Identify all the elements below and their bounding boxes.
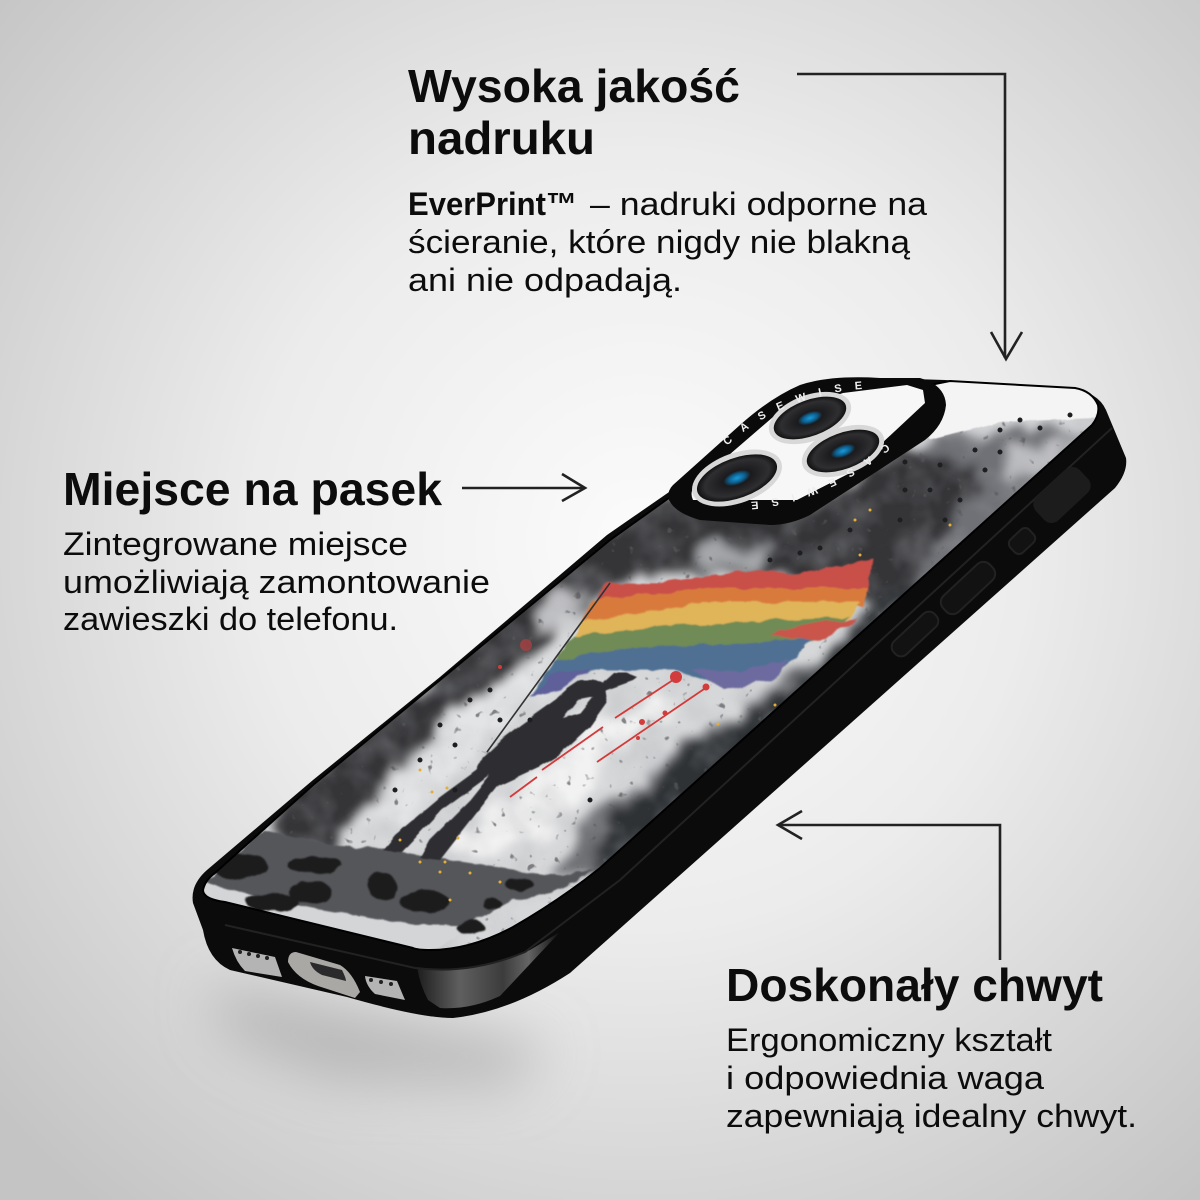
brand text upper: CASEWISE xyxy=(724,381,862,444)
rainbow flag xyxy=(530,558,873,697)
gold flecks xyxy=(400,510,950,900)
body text: EverPrint™ xyxy=(408,186,577,222)
heading: Miejsce na pasek xyxy=(63,463,442,515)
storm clouds xyxy=(280,432,1085,885)
heading: Wysoka jakość xyxy=(408,60,740,112)
speaker left xyxy=(232,948,282,977)
phone shadow xyxy=(210,985,550,1085)
arrow: grip xyxy=(778,811,1000,960)
body text: Zintegrowane miejsce xyxy=(63,526,408,562)
body text xyxy=(63,526,490,637)
watercolor mottling xyxy=(280,418,1094,948)
flag pole xyxy=(487,583,610,752)
fine speckle xyxy=(246,420,1084,944)
body text: ścieranie, które nigdy nie blakną xyxy=(408,224,910,260)
body text: ani nie odpadają. xyxy=(408,262,682,298)
body text: umożliwiają zamontowanie xyxy=(63,564,490,600)
light bottom strip xyxy=(232,890,448,948)
body text: zawieszki do telefonu. xyxy=(63,601,398,637)
bottom ports xyxy=(232,948,405,1000)
kissing couple silhouette xyxy=(383,673,637,860)
arrow: strap slot xyxy=(462,474,585,501)
art base xyxy=(204,410,1098,949)
speaker holes xyxy=(240,952,391,984)
text block: grip xyxy=(726,959,1137,1134)
island frame xyxy=(668,377,946,525)
printed artwork xyxy=(190,370,1110,970)
red paint drips xyxy=(510,680,707,797)
red splashes xyxy=(498,639,710,740)
lens right xyxy=(795,415,891,487)
ground blotches xyxy=(212,853,534,934)
body text: zapewniają idealny chwyt. xyxy=(726,1098,1137,1134)
body text xyxy=(408,186,927,298)
text block: print quality xyxy=(408,60,927,298)
side rim line xyxy=(225,428,1112,970)
heading: nadruku xyxy=(408,112,595,164)
lens left xyxy=(684,438,790,518)
white top corner xyxy=(928,382,1098,440)
charging port xyxy=(288,952,360,998)
case body xyxy=(193,378,1126,1018)
ink splatter xyxy=(395,415,1070,830)
print edge xyxy=(203,381,1098,950)
body text: i odpowiednia waga xyxy=(726,1060,1044,1096)
case bumper highlight xyxy=(417,932,560,1008)
heading: Doskonały chwyt xyxy=(726,959,1103,1011)
heading xyxy=(408,60,740,164)
phone in printed case xyxy=(192,377,1126,1018)
body text xyxy=(726,1022,1137,1134)
text block: strap slot xyxy=(63,463,490,637)
body text: – nadruki odporne na xyxy=(590,186,927,222)
camera island xyxy=(668,377,946,525)
speaker right xyxy=(365,976,405,1000)
charging port opening xyxy=(310,962,346,981)
body text: Ergonomiczny kształt xyxy=(726,1022,1052,1058)
side buttons xyxy=(888,463,1095,660)
arrow: print quality xyxy=(797,74,1022,359)
ground xyxy=(205,830,600,925)
brand text lower: CASEWISE xyxy=(751,444,889,510)
camera plate xyxy=(692,385,925,500)
lens top xyxy=(762,382,858,454)
